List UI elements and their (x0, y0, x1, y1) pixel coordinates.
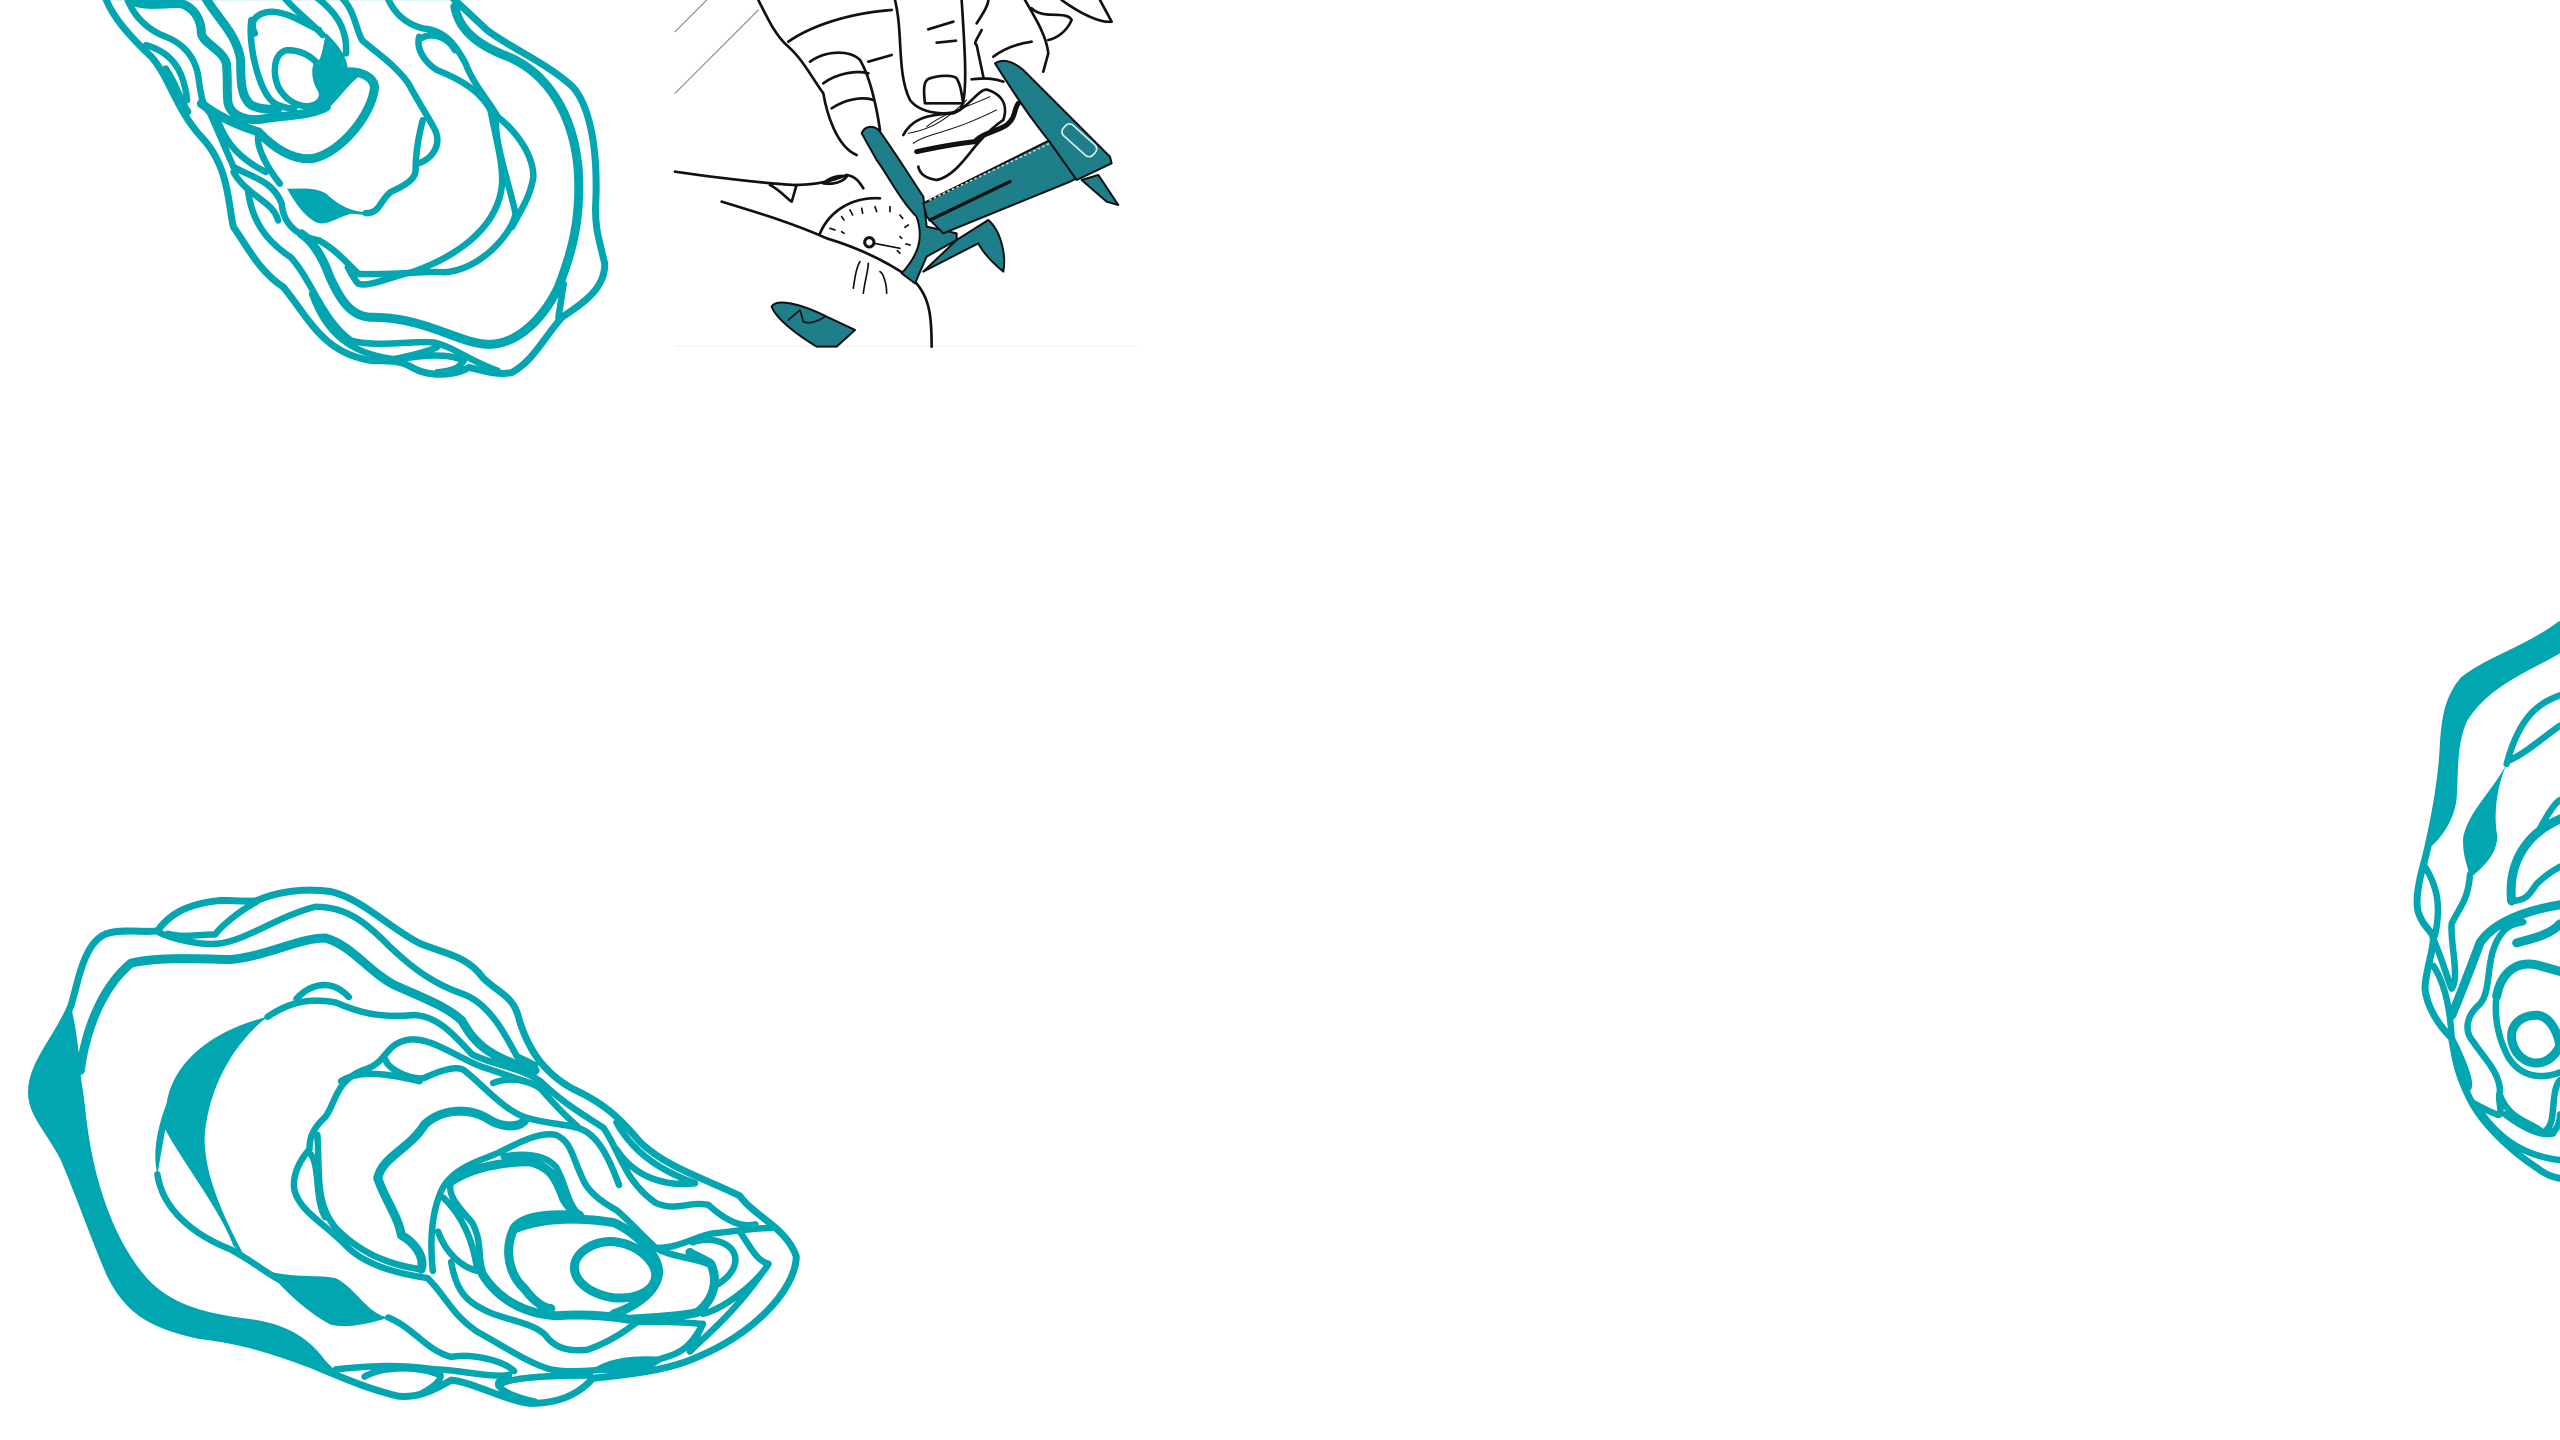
icon: oyster shell top left (105, 0, 605, 374)
icon: hands measuring an oyster with a caliper (675, 0, 1138, 347)
icon: oyster shell right edge (2417, 625, 2560, 1178)
icon: oyster shell bottom left (31, 890, 796, 1403)
